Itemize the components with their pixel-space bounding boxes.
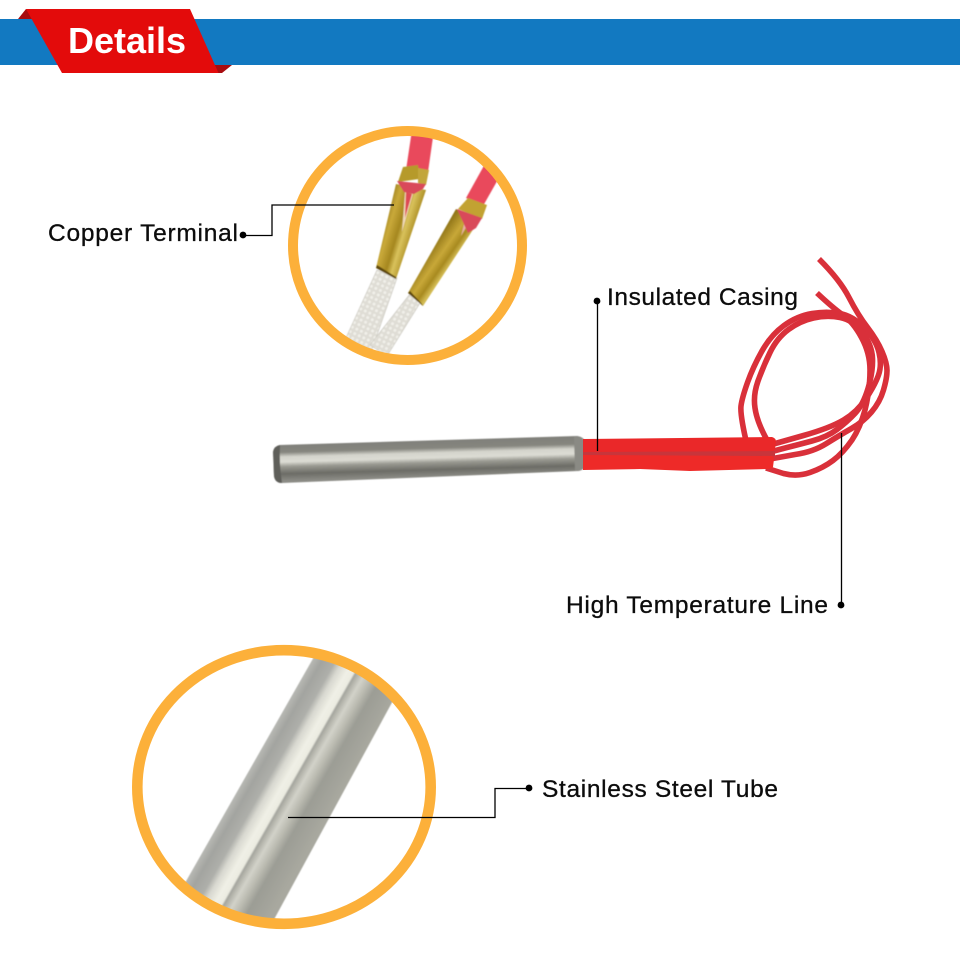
callout: High Temperature Line: High Temperature Line: [566, 592, 828, 619]
callout: Stainless Steel Tube: [288, 776, 778, 818]
heater tube body: [273, 436, 585, 483]
red lead wires: [741, 259, 887, 475]
callout: Insulated Casing: Insulated Casing: [607, 284, 798, 311]
callout: High Temperature Line: [566, 433, 844, 619]
Details ribbon banner: [18, 9, 232, 73]
callout: Stainless Steel Tube: Stainless Steel Tube: [542, 776, 778, 803]
callout: Copper Terminal: Copper Terminal: [48, 220, 238, 247]
header bar: [0, 19, 960, 65]
insulated red sleeves: [583, 437, 776, 471]
callout: Copper Terminal: [48, 205, 394, 247]
zoom circle: copper terminal: [293, 130, 522, 360]
zoom circle: stainless steel tube: [137, 620, 431, 925]
heading: Details: Details: [68, 20, 186, 61]
callout: Insulated Casing: [594, 284, 798, 451]
